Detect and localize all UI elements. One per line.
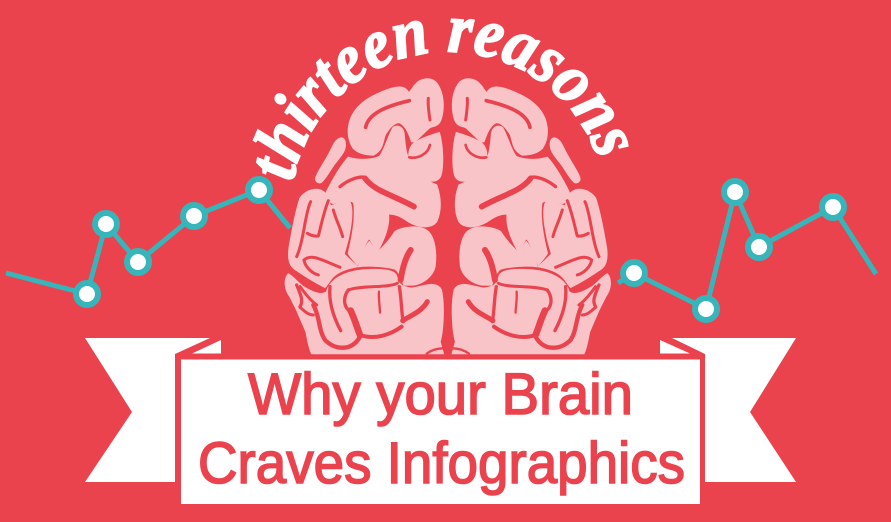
banner heading: Craves Infographics [198,431,685,496]
ribbon banner [85,338,796,504]
ribbon right tail [672,338,796,482]
right hemisphere [452,79,610,354]
left hemisphere [285,79,443,354]
ribbon left fold [192,340,221,354]
banner panel [181,360,700,504]
brain illustration [285,79,610,354]
ribbon left tail [85,338,210,482]
left line chart [6,179,290,305]
right line chart [618,181,876,320]
ribbon right fold [660,340,690,354]
banner heading: Why your Brain [248,362,633,427]
